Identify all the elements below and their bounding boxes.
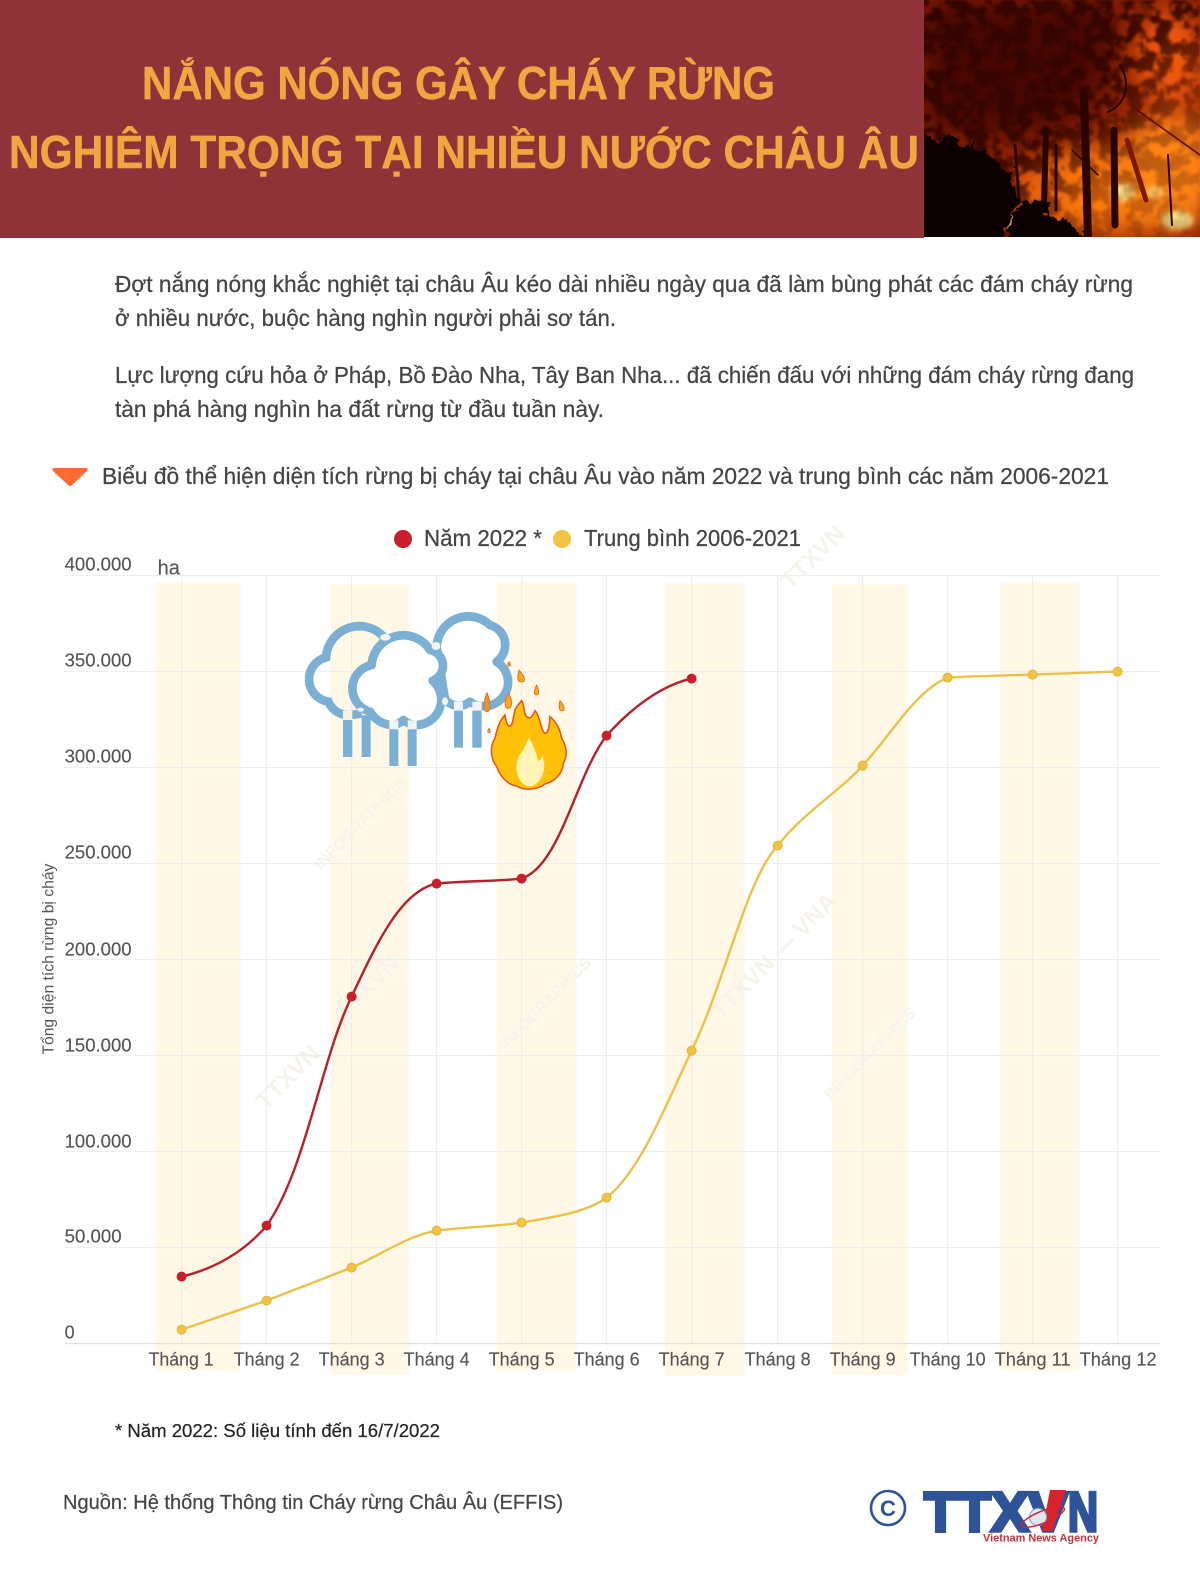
logo wordmark: V [1028,1480,1068,1543]
logo wordmark: T [924,1480,957,1543]
grid lines [65,576,1161,1344]
y axis labels: ha [158,558,181,580]
x axis labels: Tháng 8 [745,1350,811,1370]
chart legend: Năm 2022 * [424,525,542,551]
y axis labels [65,555,181,1343]
y axis labels: 400.000 [65,555,132,575]
logo: TTXVN [871,1480,1100,1544]
x axis labels: Tháng 5 [489,1350,555,1370]
y axis labels: 150.000 [65,1036,132,1056]
y axis title: Tổng diện tích rừng bị cháy [41,863,58,1055]
y axis labels: 250.000 [65,843,132,863]
y axis labels: 0 [65,1323,75,1343]
title [9,57,919,178]
x axis labels: Tháng 6 [574,1350,640,1370]
series: average 2006-2021 [177,667,1122,1334]
x axis labels: Tháng 11 [995,1350,1071,1370]
header banner [0,0,924,238]
icon: tree left [309,626,385,757]
watermarks: TTXVN [251,1040,325,1115]
intro text: Lực lượng cứu hỏa ở Pháp, Bồ Đào Nha, Tây Ban Nha... đã chiến đấu với những đám cháy rừng đang [115,362,1134,388]
y axis labels: 300.000 [65,747,132,767]
y axis labels: 50.000 [65,1227,122,1247]
y axis labels: 100.000 [65,1132,132,1152]
chart legend [394,525,801,551]
icon: copyright [871,1491,905,1525]
watermarks: TTXVN [776,520,850,595]
x axis labels: Tháng 1 [149,1350,214,1370]
watermarks: INFOGRAPHICS [821,1004,920,1103]
intro text: tàn phá hàng nghìn ha đất rừng từ đầu tuần này. [115,396,604,422]
x axis labels: Tháng 4 [404,1350,470,1370]
intro text [115,271,1134,422]
line chart [41,520,1161,1376]
footnote: * Năm 2022: Số liệu tính đến 16/7/2022 [115,1421,440,1441]
icon: tree centre [352,634,448,766]
watermarks: INFOGRAPHICS [496,954,595,1053]
x axis labels: Tháng 12 [1080,1350,1157,1370]
x axis labels: Tháng 2 [234,1350,300,1370]
logo wordmark: N [1068,1480,1098,1543]
x axis labels: Tháng 3 [319,1350,385,1370]
chart heading: Biểu đồ thể hiện diện tích rừng bị cháy tại châu Âu vào năm 2022 và trung bình các năm 2006-2021 [102,463,1109,489]
intro text: Đợt nắng nóng khắc nghiệt tại châu Âu kéo dài nhiều ngày qua đã làm bùng phát các đám cháy rừng [115,271,1133,297]
x axis labels: Tháng 10 [910,1350,986,1370]
y axis labels: 350.000 [65,651,132,671]
icon: tree right [437,616,508,748]
logo wordmark [924,1480,1098,1543]
logo wordmark: T [958,1480,991,1543]
watermarks: INFOGRAPHICS [311,774,410,873]
watermarks [251,520,920,1115]
month highlight bands [156,583,1080,1376]
intro text: ở nhiều nước, buộc hàng nghìn người phải sơ tán. [115,305,616,331]
title: NGHIÊM TRỌNG TẠI NHIỀU NƯỚC CHÂU ÂU [9,126,919,178]
logo wordmark: X [991,1480,1029,1543]
series: year 2022 [177,674,697,1282]
x axis labels [149,1350,1157,1370]
x axis labels: Tháng 9 [830,1350,896,1370]
icon: orange triangle marker [52,468,88,486]
y axis labels: 200.000 [65,940,132,960]
icon: copyright: C [880,1496,896,1521]
logo tagline: Vietnam News Agency [983,1532,1100,1544]
icon: burning trees [309,616,566,789]
header photo: forest fire [915,0,1200,245]
watermarks: TTXVN [331,950,405,1025]
chart legend: Trung bình 2006-2021 [584,525,801,551]
source: Nguồn: Hệ thống Thông tin Cháy rừng Châu Âu (EFFIS) [63,1491,563,1514]
title: NẮNG NÓNG GÂY CHÁY RỪNG [142,57,775,109]
x axis labels: Tháng 7 [659,1350,725,1370]
icon: flame [484,662,566,789]
logo V accent and globe [1019,1490,1067,1531]
watermarks: TTXVN — VNA [706,888,843,1025]
